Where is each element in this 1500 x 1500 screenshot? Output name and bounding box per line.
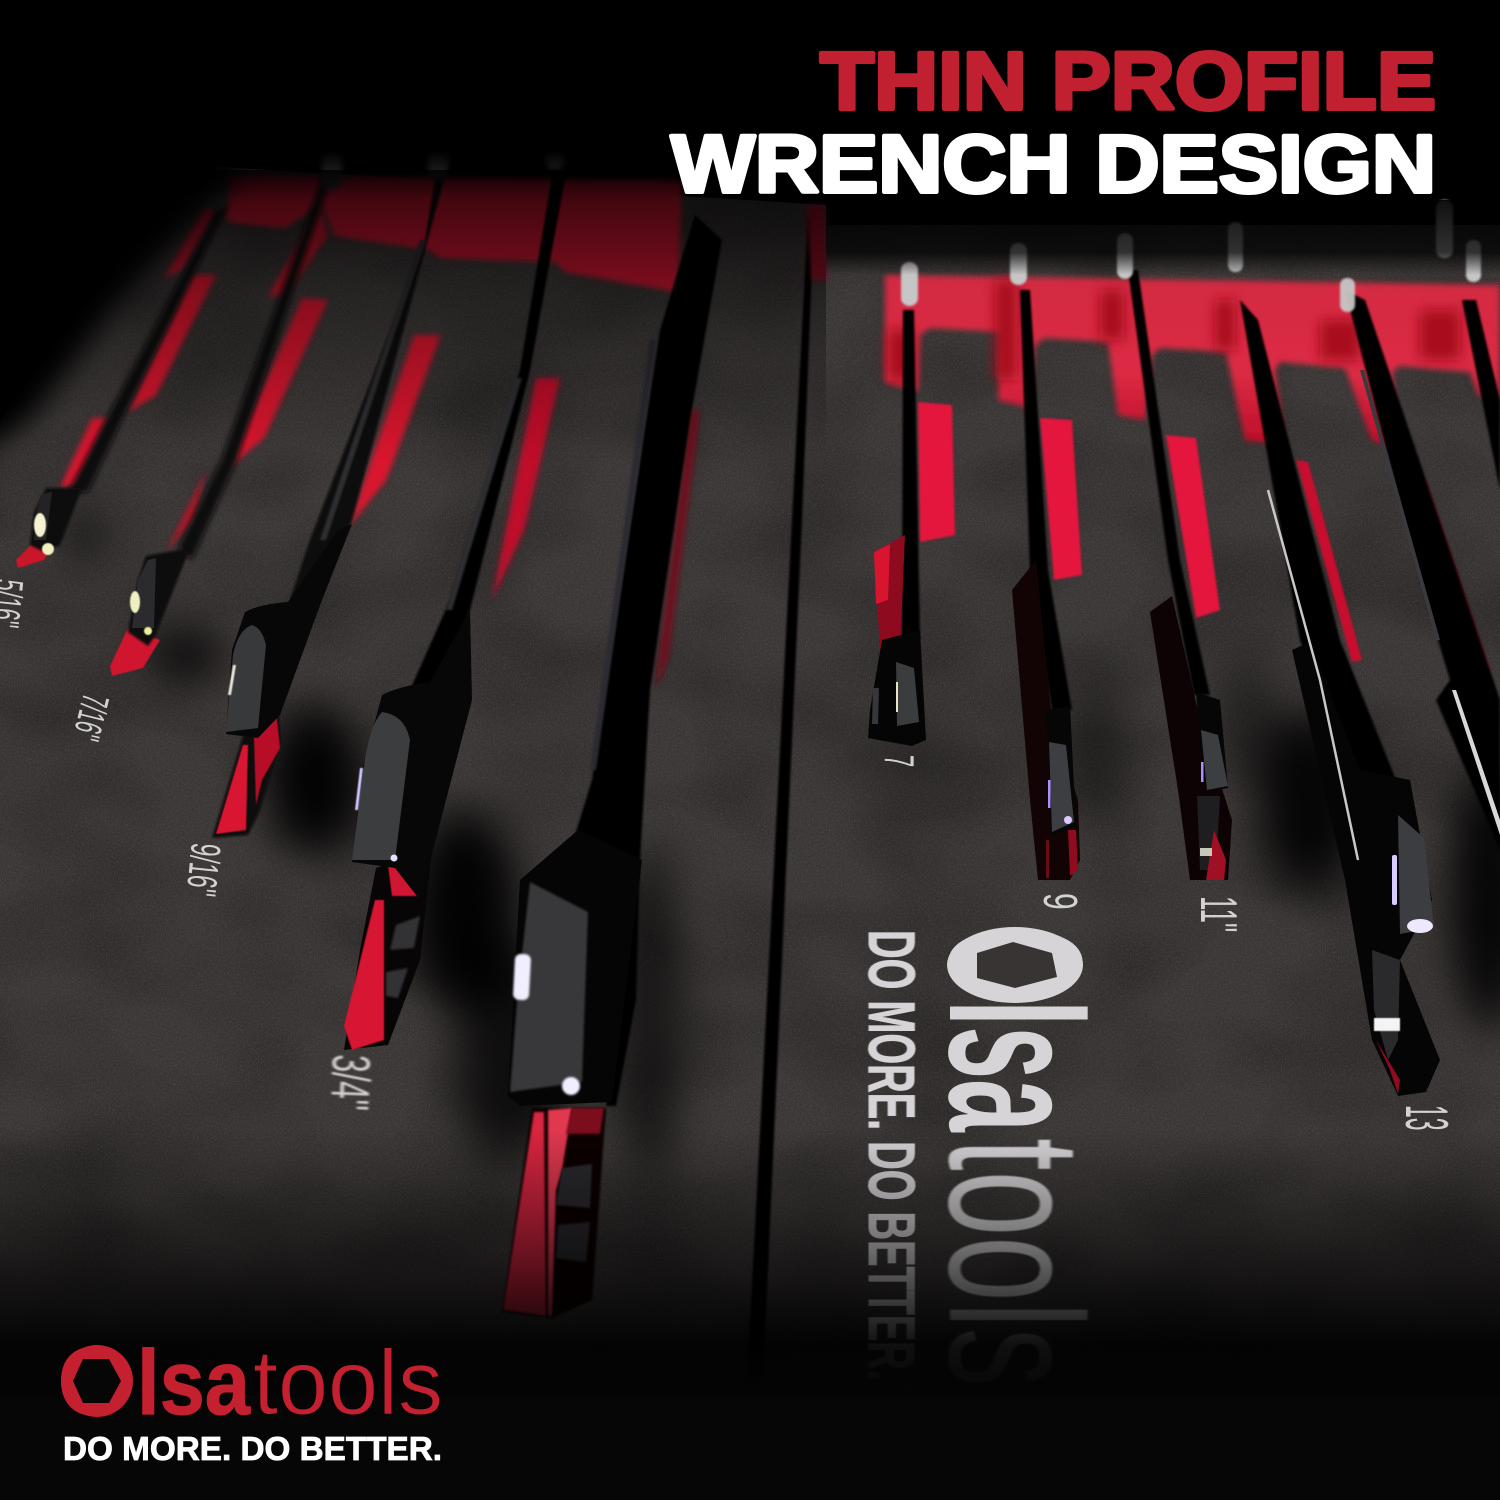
top darkening bbox=[0, 0, 1500, 200]
right slot 1 bbox=[918, 402, 955, 542]
left slot 3 bbox=[348, 335, 441, 528]
wrench 13 mm bbox=[1240, 300, 1440, 1096]
red sliver at tray gap bbox=[806, 205, 826, 280]
logo tagline: DO MORE. DO BETTER. bbox=[63, 1430, 442, 1467]
wrench 5/16 bbox=[16, 205, 228, 568]
logo O letter: O bbox=[57, 1326, 133, 1436]
right slot 5 bbox=[1416, 480, 1490, 674]
head face bbox=[352, 712, 410, 860]
title line 1: THIN PROFILE bbox=[820, 36, 1436, 127]
right tray top darkening bbox=[826, 200, 1500, 275]
dark red folds bbox=[888, 280, 1460, 380]
left slot 6 bbox=[166, 470, 206, 552]
foam O ring bbox=[947, 927, 1083, 1003]
title bbox=[671, 36, 1436, 210]
label 11: 11" bbox=[1190, 896, 1248, 932]
left slot 5 bbox=[655, 410, 700, 690]
red liner: left tray bbox=[60, 175, 826, 690]
left slot 2 bbox=[228, 298, 328, 468]
red liner sliver 2 bbox=[268, 206, 328, 296]
foam texture bbox=[0, 242, 1500, 1278]
wrench 7/16 bbox=[110, 150, 340, 676]
socket slot bbox=[502, 1108, 606, 1318]
socket slot bbox=[344, 850, 432, 1050]
red liner sliver 1 bbox=[164, 206, 218, 278]
label 13: 13 bbox=[1393, 1105, 1460, 1131]
wrench 17 mm bbox=[1462, 300, 1500, 490]
head bbox=[226, 524, 352, 738]
cast shadows of wrenches on foam bbox=[60, 500, 1500, 1180]
brand logo bbox=[57, 1326, 443, 1467]
left slot 4 bbox=[492, 378, 560, 600]
label 7: 7 bbox=[875, 755, 921, 767]
label 3/4: 3/4" bbox=[319, 1054, 380, 1111]
title line 2: WRENCH DESIGN bbox=[671, 119, 1436, 210]
wrench tips on left tray bbox=[208, 130, 564, 209]
left corner darkening bbox=[0, 0, 240, 470]
logo hexagon bbox=[73, 1359, 121, 1403]
wrench 11 mm bbox=[1128, 270, 1232, 880]
left tray darkening bbox=[0, 170, 826, 460]
wrench 7 mm bbox=[868, 310, 926, 746]
wrench large bbox=[502, 215, 722, 1318]
head bbox=[508, 830, 642, 1106]
bottom black strip bbox=[0, 1398, 1500, 1500]
label 7/16: 7/16" bbox=[64, 690, 116, 745]
head bbox=[352, 610, 472, 900]
small red tab bbox=[60, 418, 108, 488]
wrench tips on right tray bbox=[901, 200, 1481, 312]
gap between the foam trays bbox=[746, 215, 814, 1400]
socket slot bbox=[212, 705, 280, 838]
red liner: right tray bbox=[885, 275, 1500, 674]
wrench 3/4 bbox=[344, 140, 572, 1050]
foam tagline: DO MORE. DO BETTER. bbox=[854, 930, 928, 1381]
bottom darkening bbox=[0, 1130, 1500, 1400]
foam printed logo bbox=[854, 926, 1122, 1387]
wrench 9 mm bbox=[1012, 290, 1080, 880]
foam wordmark light: tools bbox=[909, 1138, 1121, 1387]
right slot 4 bbox=[1296, 460, 1362, 662]
logo O ring bbox=[61, 1345, 133, 1417]
logo lsa: lsa bbox=[137, 1332, 251, 1434]
logo tools: tools bbox=[253, 1332, 443, 1434]
head face bbox=[510, 882, 588, 1092]
left slot 1 bbox=[128, 275, 216, 412]
right slot 2 bbox=[1040, 418, 1082, 580]
right slot 3 bbox=[1166, 435, 1220, 618]
foam wordmark: Olsa bbox=[910, 926, 1122, 1133]
wrench 9/16 bbox=[212, 150, 452, 838]
foam hexagon in O bbox=[977, 942, 1057, 988]
head face bbox=[226, 625, 266, 732]
right slot edge bbox=[606, 860, 640, 1106]
wrench 15 mm bbox=[1345, 290, 1500, 850]
label 9/16: 9/16" bbox=[177, 841, 229, 899]
size labels printed on foam bbox=[0, 577, 1460, 1131]
label 9: 9 bbox=[1033, 893, 1086, 910]
